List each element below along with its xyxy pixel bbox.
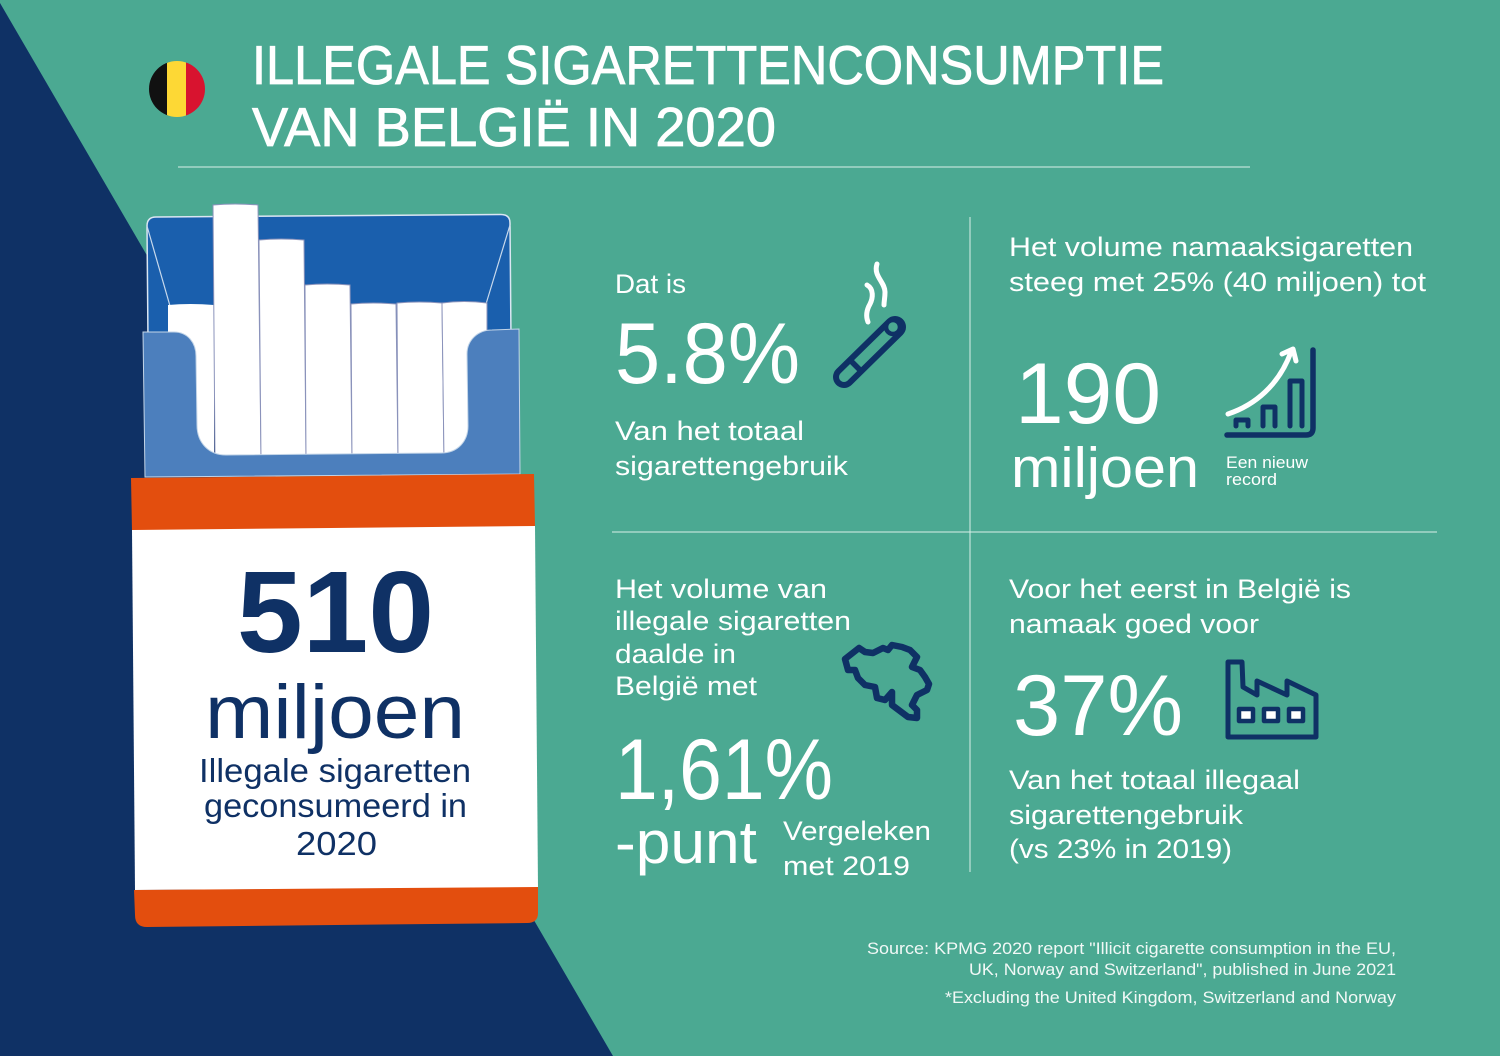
panel: share of total — [615, 264, 900, 481]
intro text: Het volume namaaksigaretten — [1009, 232, 1413, 262]
cigarette pack — [131, 204, 538, 927]
intro text: Dat is — [615, 269, 686, 299]
pack lid — [147, 214, 511, 340]
caption: met 2019 — [783, 851, 910, 881]
orange top band — [131, 474, 535, 531]
panel: counterfeit share — [1009, 574, 1351, 864]
big number: 190 — [1015, 346, 1161, 442]
navy diagonal background — [0, 3, 613, 1056]
intro text: illegale sigaretten — [615, 606, 851, 636]
white label — [132, 526, 538, 890]
orange bottom band — [134, 887, 538, 927]
intro text: steeg met 25% (40 miljoen) tot — [1009, 267, 1427, 297]
caption — [615, 416, 849, 481]
intro text: daalde in — [615, 639, 736, 669]
caption: Van het totaal illegaal — [1009, 765, 1300, 795]
big number: 1,61% — [615, 722, 833, 818]
big number: 5.8% — [615, 306, 800, 402]
source note: *Excluding the United Kingdom, Switzerland and Norway — [945, 988, 1397, 1007]
caption — [783, 816, 931, 881]
pack unit: miljoen — [205, 670, 465, 755]
pack description: 2020 — [296, 825, 377, 862]
pack description: geconsumeerd in — [204, 787, 467, 824]
pack front pocket — [143, 329, 520, 477]
source note: UK, Norway and Switzerland", published in June 2021 — [969, 960, 1396, 979]
intro text: Voor het eerst in België is — [1009, 574, 1351, 604]
title — [252, 34, 1164, 158]
icon: rising bar chart — [1227, 349, 1313, 435]
unit: -punt — [615, 809, 757, 876]
intro text: Het volume van — [615, 574, 827, 604]
cigarettes — [168, 204, 487, 460]
icon: factory — [1228, 662, 1316, 737]
caption: sigarettengebruik — [615, 451, 849, 481]
pack description: Illegale sigaretten — [199, 752, 471, 789]
icon: map of Belgium — [845, 645, 929, 718]
source note: Source: KPMG 2020 report "Illicit cigarette consumption in the EU, — [867, 939, 1396, 958]
intro text — [1009, 232, 1427, 297]
icon: Belgian flag — [149, 61, 205, 117]
title: VAN BELGIË IN 2020 — [252, 96, 776, 158]
caption: sigarettengebruik — [1009, 800, 1244, 830]
title: ILLEGALE SIGARETTENCONSUMPTIE — [252, 34, 1164, 96]
icon: cigarette with smoke — [844, 264, 900, 377]
caption — [1226, 453, 1309, 489]
caption: record — [1226, 470, 1277, 489]
intro text: namaak goed voor — [1009, 609, 1259, 639]
caption: Van het totaal — [615, 416, 804, 446]
intro text — [615, 574, 851, 701]
big number: 37% — [1013, 658, 1183, 754]
panel: illegal volume decline — [615, 574, 931, 881]
panel: counterfeit volume — [1009, 232, 1427, 500]
unit: miljoen — [1011, 436, 1199, 500]
intro text: België met — [615, 671, 758, 701]
caption: (vs 23% in 2019) — [1009, 834, 1232, 864]
source note — [867, 939, 1397, 1007]
pack description — [199, 752, 471, 862]
intro text — [1009, 574, 1351, 639]
caption: Een nieuw — [1226, 453, 1309, 472]
caption: Vergeleken — [783, 816, 931, 846]
caption — [1009, 765, 1300, 864]
pack headline number: 510 — [237, 547, 434, 677]
